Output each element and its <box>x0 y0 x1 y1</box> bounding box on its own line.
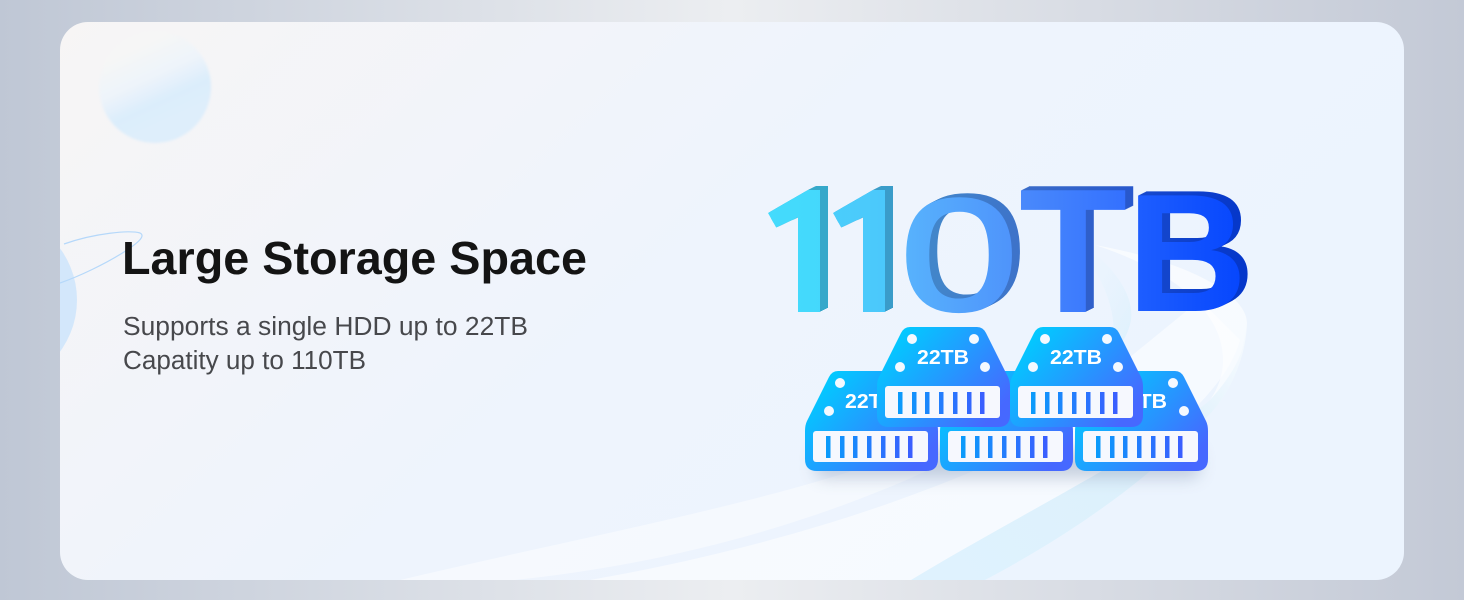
big 3D number: 110TB: 0 <box>900 166 1018 344</box>
decorative left orb and orbit <box>60 231 143 352</box>
big 3D number: 110TB: B <box>1127 160 1247 347</box>
icon: hard drive lower middle <box>940 371 1073 471</box>
text block: description: Capatity up to 110TB <box>123 347 366 375</box>
drives shadow <box>815 448 1200 478</box>
icon: hard drive upper left: 22TB <box>917 347 969 369</box>
big 3D number: 110TB: T <box>1019 152 1127 350</box>
decorative bottom-right swooshes <box>592 246 1247 580</box>
icon: hard drive lower right <box>1075 371 1208 471</box>
text block: description: Supports a single HDD up to 22TB <box>123 313 528 341</box>
icon: hard drive lower right: 22TB <box>1115 391 1167 413</box>
icon: hard drive upper right: 22TB <box>1050 347 1102 369</box>
decorative ball top-left <box>99 31 211 143</box>
big 3D number: 110TB: 1 <box>810 152 938 350</box>
icon: hard drive upper left <box>877 327 1010 427</box>
heading: Large Storage Space <box>122 232 587 284</box>
big 3D number: 110TB: 1 <box>745 152 873 350</box>
icon: hard drive lower left: 22TB <box>845 391 897 413</box>
text block: description <box>123 313 528 375</box>
icon: hard drive lower left <box>805 371 938 471</box>
big 3D number: 110TB <box>768 186 1248 314</box>
icon: hard drive upper right <box>1010 327 1143 427</box>
